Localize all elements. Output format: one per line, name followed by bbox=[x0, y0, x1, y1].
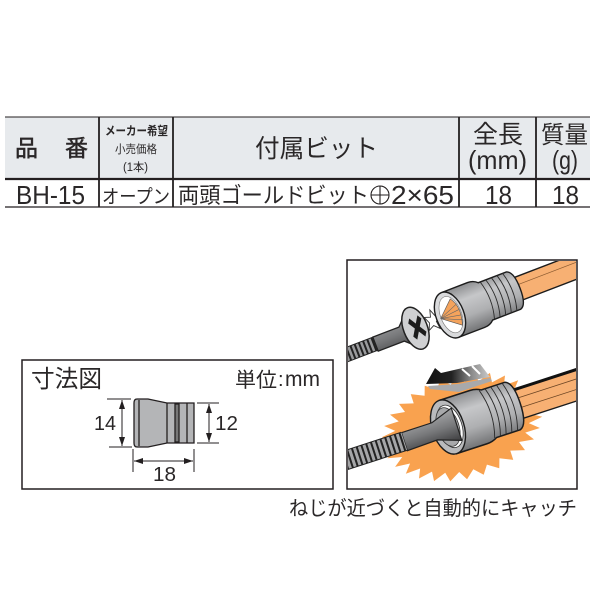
cell: length: 18 bbox=[485, 180, 512, 210]
illustration frame bbox=[347, 260, 577, 489]
panel: dimensions bbox=[22, 360, 333, 489]
dimension 14: 14 bbox=[94, 413, 116, 435]
dimension 14 bbox=[94, 399, 132, 447]
dimension 18: 18 bbox=[153, 464, 176, 486]
bottom screw threads bbox=[341, 441, 404, 462]
heading: price: 小売価格 bbox=[115, 142, 157, 156]
dimensions title: 寸法図 bbox=[31, 366, 102, 393]
dimension 18 bbox=[133, 449, 194, 486]
cell: bit: 両頭ゴールドビット bbox=[178, 183, 369, 208]
illustration contents bbox=[348, 261, 576, 482]
panel: usage illustration bbox=[346, 259, 578, 490]
heading: included bit: 付属ビット bbox=[255, 135, 378, 163]
table rules bbox=[5, 117, 590, 207]
bottom holder body bbox=[439, 377, 529, 454]
cell: price: オープン bbox=[102, 186, 170, 208]
magnetic spark bbox=[424, 308, 441, 332]
cell: bit size: 2×65 bbox=[391, 180, 454, 210]
arrow: direction of movement bbox=[426, 364, 492, 392]
caption: ねじが近づくと自動的にキャッチ bbox=[289, 497, 577, 520]
heading: length bbox=[468, 121, 527, 175]
heading: mass: 質量 bbox=[541, 122, 588, 149]
heading: mass bbox=[541, 122, 588, 175]
top bit shaft bbox=[514, 261, 576, 300]
cell: mass: 18 bbox=[552, 180, 579, 210]
top holder ridges bbox=[480, 272, 520, 319]
bottom bit shaft bbox=[514, 368, 576, 419]
phillips recess bbox=[408, 315, 426, 340]
bottom: holder catching screw bbox=[348, 368, 576, 470]
heading: price: メーカー希望 bbox=[105, 123, 168, 138]
spec table bbox=[5, 117, 590, 210]
heading: price: (1本) bbox=[123, 160, 148, 174]
bottom screw shank bbox=[401, 407, 463, 452]
top bit tip bbox=[440, 298, 463, 326]
heading: length: 全長 bbox=[473, 121, 523, 149]
panel frame bbox=[22, 360, 333, 489]
unit label bbox=[235, 368, 320, 392]
bottom holder ridges bbox=[479, 382, 521, 438]
top screw threads bbox=[345, 343, 377, 355]
cell: product number: BH-15 bbox=[16, 180, 85, 210]
heading: product number: 品 bbox=[15, 135, 38, 161]
dimension 12: 12 bbox=[215, 413, 238, 435]
top screw shank bbox=[372, 321, 410, 352]
heading: length: (mm) bbox=[468, 145, 527, 175]
top holder face bbox=[434, 291, 466, 339]
icon: plus circle bbox=[371, 186, 389, 204]
dimension 12 bbox=[197, 403, 238, 443]
unit label: mm bbox=[285, 368, 320, 391]
top screw head bbox=[401, 306, 430, 350]
heading: product number: 番 bbox=[65, 135, 88, 161]
bottom: starburst bbox=[382, 373, 542, 482]
top: bit holder and screw apart bbox=[348, 261, 576, 362]
bottom holder face bbox=[430, 399, 466, 455]
unit label: : bbox=[278, 369, 284, 391]
part outline bbox=[134, 399, 194, 447]
top holder body bbox=[441, 266, 529, 337]
table header background bbox=[5, 117, 590, 178]
unit label: 単位 bbox=[235, 369, 277, 392]
heading: mass: (g) bbox=[552, 145, 578, 175]
heading: price bbox=[105, 123, 168, 174]
